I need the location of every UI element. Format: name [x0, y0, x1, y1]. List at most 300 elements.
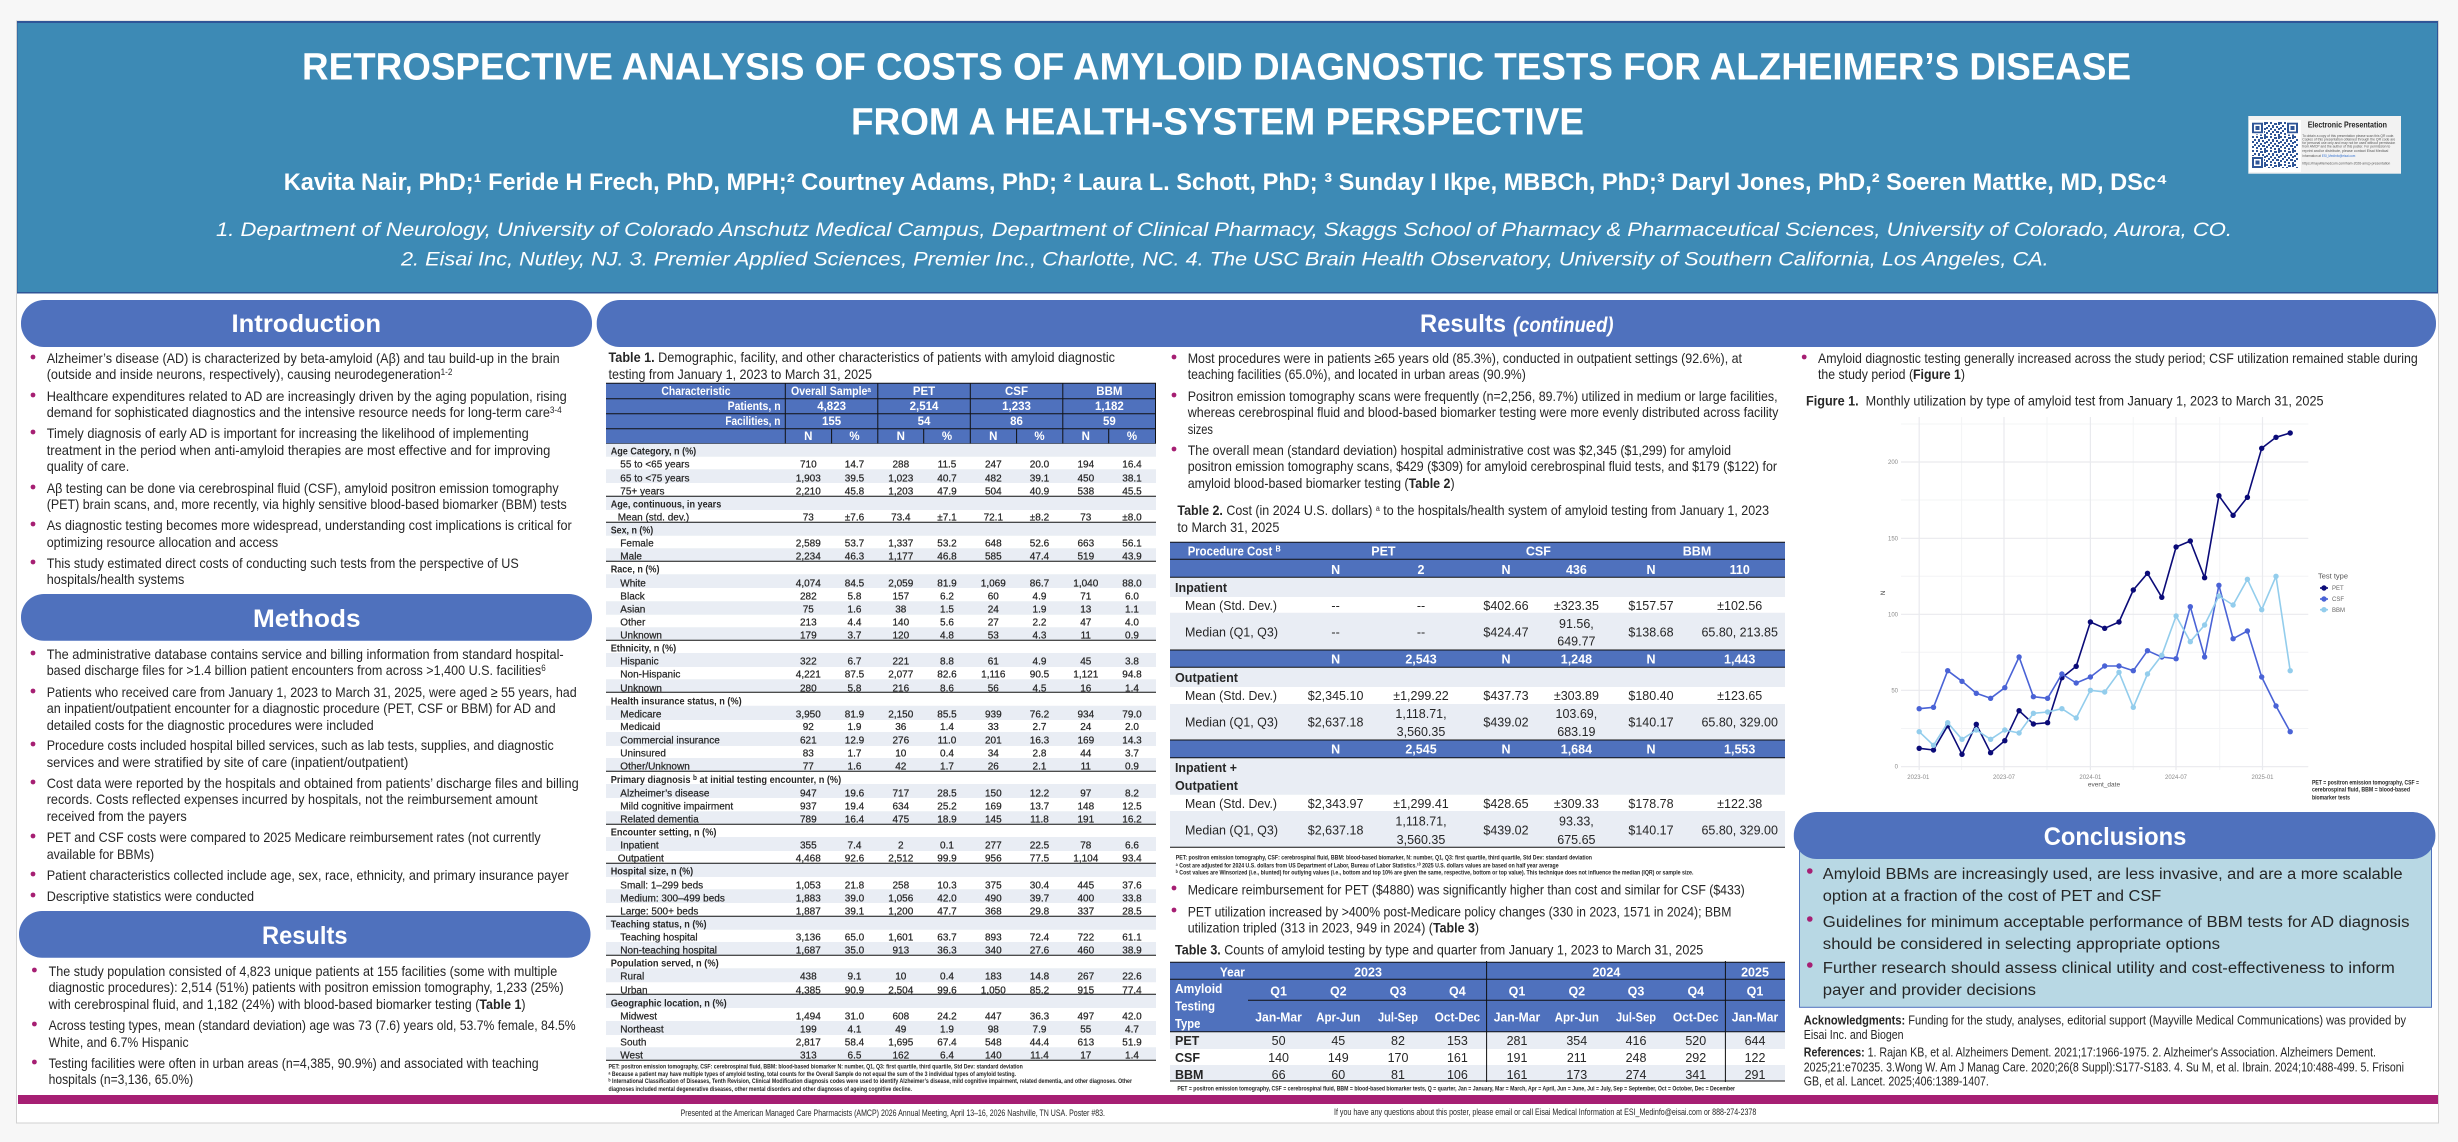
table 1 body: 282: [800, 592, 817, 602]
table 2 body: 103.69,: [1556, 707, 1597, 721]
table 3 body: Q2: [1568, 984, 1585, 998]
table 3 body: 81: [1391, 1068, 1405, 1082]
chart legend: [2318, 572, 2348, 614]
table 1 body: 38.9: [1122, 946, 1142, 956]
table 1 body: 10.3: [937, 880, 957, 892]
table 1 body: 42.0: [1122, 1012, 1142, 1022]
table 1 header: 54: [918, 416, 931, 428]
table 2 body: Mean (Std. Dev.): [1185, 689, 1277, 703]
y axis labels: N: [1881, 591, 1887, 595]
table 1 body: 78: [1080, 840, 1092, 852]
table 2 body: ±1,299.22: [1393, 689, 1449, 703]
table 1 body: 0.4: [940, 972, 954, 982]
x axis labels: 2024-01: [2079, 775, 2102, 781]
table 1 body: 1.4: [940, 722, 954, 733]
table 1 body: 519: [1077, 552, 1095, 562]
table 1 body: 482: [985, 474, 1002, 484]
table 1 body: 150: [985, 788, 1002, 800]
table 1 body: Hospital size, n (%): [611, 866, 693, 878]
table 2 body: Inpatient +: [1175, 761, 1237, 775]
table 1 header: BBM: [1096, 386, 1123, 398]
table 1 body: 30.4: [1030, 880, 1050, 892]
bullets: introduction: demand for sophisticated diagnostics and the intensive resource needs for long-term care: [47, 404, 602, 420]
table 1 body: 75+ years: [620, 486, 665, 498]
table 1 body: 25.2: [937, 802, 957, 812]
electronic presentation QR card: https://mayvillemedcom.com/ham-2026-amcp-presentation: [2302, 162, 2390, 166]
table 1 body: Other: [620, 618, 646, 628]
table 1 body: 3,950: [796, 710, 821, 720]
table 2 body: 65.80, 329.00: [1701, 716, 1778, 730]
table 1 body: 183: [985, 972, 1002, 982]
table 1 body: 40.9: [1030, 486, 1050, 498]
table 1 body: 45: [1080, 656, 1092, 668]
table 3 body: 82: [1391, 1034, 1405, 1048]
bullets: conclusions: payer and provider decisions: [1823, 982, 2036, 999]
table 1 body: 2,210: [796, 486, 821, 498]
bullets: results: White, and 6.7% Hispanic: [49, 1034, 189, 1050]
table 1 body: 90.5: [1030, 670, 1050, 680]
table 1 body: 44.4: [1030, 1038, 1050, 1048]
line: CSF: [1919, 585, 2290, 732]
table 1 body: Outpatient: [618, 854, 664, 864]
table 2 body: 683.19: [1557, 725, 1596, 739]
table 3 body: 341: [1685, 1068, 1706, 1082]
table 1 body: 947: [800, 788, 817, 800]
table 3 body: 520: [1685, 1034, 1706, 1048]
table 2 body: B: [1275, 544, 1281, 554]
table 2 body: $437.73: [1483, 689, 1529, 703]
table 2 body: N: [1501, 742, 1511, 756]
table 1 body: Black: [620, 592, 646, 602]
electronic presentation QR card: for personal use only and may not be used without permission: [2302, 141, 2395, 145]
table 1 body: 915: [1077, 986, 1095, 996]
table 1 body: 8.8: [940, 656, 954, 668]
table 1 body: 140: [985, 1050, 1002, 1062]
bullets: conclusions: Amyloid BBMs are increasingly used, are less invasive, and are a more scalable: [1823, 866, 2403, 883]
table 2 body: $424.47: [1483, 626, 1529, 640]
table 1 body: 36: [895, 722, 907, 733]
table 3 body: 416: [1626, 1034, 1646, 1048]
table 3 body: CSF: [1175, 1051, 1200, 1065]
table 1 body: 2,077: [888, 670, 914, 680]
table 1 body: 56.1: [1122, 538, 1142, 550]
bullets: methods: The administrative database contains service and billing information from standard hospital-: [47, 646, 564, 662]
table 1 body: 77: [803, 762, 814, 772]
table 3 body: PET: [1175, 1034, 1200, 1048]
figure abbreviations note: cerebrospinal fluid, BBM = blood-based: [2312, 786, 2410, 794]
table 1 body: 4,221: [796, 670, 821, 680]
table 1 body: 717: [892, 788, 910, 800]
table 1 body: 313: [800, 1050, 817, 1062]
table 2 body: ±1,299.41: [1393, 797, 1449, 811]
bullets: introduction: As diagnostic testing becomes more widespread, understanding cost implications is critical for: [47, 517, 572, 533]
table 1 body: 82.6: [937, 670, 957, 680]
table 1 body: 55 to <65 years: [620, 460, 690, 470]
table 3 body: 191: [1507, 1051, 1527, 1065]
table 2 body: ±309.33: [1554, 797, 1599, 811]
table 1 body: Teaching status, n (%): [611, 920, 706, 930]
table 1 body: 1,177: [888, 552, 914, 562]
table 1 body: 4,074: [796, 578, 821, 590]
table 2: costs: [1170, 502, 1785, 877]
table 2 body: $178.78: [1628, 797, 1674, 811]
table 3 caption: Table 3. Counts of amyloid testing by type and quarter from January 1, 2023 to March 31, 2025: [1175, 941, 1703, 957]
bullets: conclusions: should be considered in selecting appropriate options: [1823, 936, 2220, 953]
table 1 body: 447: [985, 1012, 1002, 1022]
acknowledgments: [1804, 1013, 2407, 1042]
references: [1804, 1045, 2404, 1088]
table 1 body: Age Category, n (%): [611, 446, 696, 458]
heading: results continued: [597, 300, 2436, 347]
table 1 body: 55: [1080, 1024, 1092, 1036]
table 1 body: 87.5: [845, 670, 865, 680]
bullets: introduction: treatment in the period when anti-amyloid therapies are most effective and for improving: [47, 442, 550, 458]
bullets: conclusions: Guidelines for minimum acceptable performance of BBM tests for AD diagnosis: [1823, 914, 2410, 931]
table 1 body: 497: [1077, 1012, 1095, 1022]
table 1 body: 73: [803, 512, 814, 524]
bullets: methods: PET and CSF costs were compared to 2025 Medicare reimbursement rates (not currently: [47, 829, 541, 845]
bullets: cost findings: positron emission tomography scans, $429 ($309) for amyloid cerebrospinal fluid tests, and $179 ($122) for: [1188, 458, 1777, 474]
bullets: introduction: Alzheimer’s disease (AD) is characterized by beta-amyloid (Aβ) and tau build-up in the brain: [47, 350, 560, 366]
table 1 body: 14.7: [845, 460, 865, 470]
table 1 body: Small: 1–299 beds: [620, 880, 703, 892]
bullets: results: Across testing types, mean (standard deviation) age was 73 (7.6) years old, 53.7% female, 84.5%: [49, 1017, 576, 1033]
line: BBM: [1919, 576, 2290, 745]
table 1 body: 2.7: [1033, 722, 1047, 733]
table 1 body: Hispanic: [620, 656, 659, 668]
table 1 header: %: [942, 431, 952, 443]
table 1 body: 42: [895, 762, 907, 772]
table 1 body: 11.8: [1030, 814, 1049, 826]
table 3 body: Apr-Jun: [1555, 1010, 1599, 1024]
chart legend: CSF: [2332, 597, 2344, 603]
table 1 body: 7.4: [848, 840, 862, 852]
table 2 body: 2: [1418, 563, 1425, 577]
panel: results: [19, 911, 590, 1087]
table 2 footnotes: PET: positron emission tomography, CSF: cerebrospinal fluid, BBM: blood-based biomarker, N: number, Q1, Q3: first quartile, third quartile, Std Dev: standard deviation: [1176, 855, 1592, 862]
acknowledgments: Eisai Inc. and Biogen: [1804, 1028, 1904, 1042]
table 1 body: 140: [892, 618, 910, 628]
table 1 body: 148: [1077, 802, 1095, 812]
bullets: introduction: 3-4: [550, 405, 562, 415]
bullets: methods: Patients who received care from January 1, 2023 to March 31, 2025, were aged ≥ 55 years, had: [47, 684, 577, 700]
table 1 body: 538: [1077, 486, 1095, 498]
table 1 body: 63.7: [937, 932, 957, 944]
figure abbreviations note: PET = positron emission tomography, CSF =: [2312, 780, 2419, 786]
table 1 body: 216: [892, 684, 910, 694]
bullets: introduction: [31, 350, 572, 587]
table 1 body: 11: [1081, 630, 1091, 642]
bullets: methods: based discharge files for >1.4 billion patient encounters from across >1,400 U.S. facilities: [47, 662, 598, 678]
table 1 body: 58.4: [845, 1038, 865, 1048]
table 1 body: 27: [988, 618, 999, 628]
table 1 body: 4,468: [796, 854, 821, 864]
table 2 body: --: [1331, 599, 1340, 613]
table 1 body: 258: [892, 880, 910, 892]
table 3 body: Testing: [1175, 1000, 1215, 1014]
table 1 body: 3.7: [1125, 748, 1139, 760]
table 1 body: 39.1: [845, 906, 865, 918]
table 1 body: 6.2: [940, 592, 954, 602]
electronic presentation QR card: Electronic Presentation: [2308, 120, 2387, 130]
table 3 body: 291: [1745, 1068, 1765, 1082]
panel: methods: [21, 594, 592, 904]
table 1 body: 12.2: [1030, 788, 1050, 800]
table 1 body: 36.3: [1030, 1012, 1050, 1022]
table 1 header: %: [849, 431, 860, 443]
table 2 body: Inpatient: [1175, 581, 1228, 595]
table 1 body: 28.5: [937, 788, 957, 800]
table 1 body: 2: [898, 840, 904, 852]
table 1 body: Ethnicity, n (%): [611, 644, 676, 654]
table 1 header: 4,823: [817, 401, 846, 413]
table 1 body: White: [620, 578, 646, 590]
bullets: methods: records. Costs reflected expenses incurred by hospitals, not the reimbursement amount: [47, 791, 538, 807]
table 2 footnotes: [1176, 855, 1694, 877]
panel: conclusions: [1794, 812, 2435, 1007]
table 1 body: 722: [1077, 932, 1095, 944]
table 1 header: CSF: [1005, 386, 1028, 398]
table 1 body: 21.8: [845, 880, 865, 892]
table 3 body: 211: [1567, 1051, 1587, 1065]
table 1 body: 47: [1080, 618, 1092, 628]
electronic presentation QR card: from AMCP and the author of this poster. For permission to: [2302, 144, 2390, 148]
panel: introduction: [21, 300, 592, 587]
table 1 body: 247: [985, 460, 1002, 470]
table 1 body: Male: [620, 552, 642, 562]
table 1 body: 2.1: [1033, 762, 1047, 772]
bullets: cost findings: Most procedures were in patients ≥65 years old (85.3%), conducted in outpatient settings (92.6%), at: [1188, 350, 1742, 366]
bullets: introduction: quality of care.: [47, 458, 129, 474]
table 1 body: 73.4: [891, 512, 911, 524]
table 2 body: $2,637.18: [1308, 824, 1363, 838]
table 1 body: 663: [1077, 538, 1095, 550]
table 1 header: N: [897, 431, 905, 443]
heading: results continued: (continued): [1513, 314, 1614, 337]
electronic presentation QR card: Information at ESI_Medinfo@eisai.com: [2302, 154, 2355, 158]
table 1 body: Rural: [620, 972, 644, 982]
table 1 body: 0.9: [1125, 630, 1139, 642]
table 1 body: 280: [800, 684, 817, 694]
table 1 body: 1.9: [848, 722, 862, 733]
table 1 body: 1,695: [888, 1038, 914, 1048]
table 1 body: 1,069: [981, 578, 1006, 590]
bullets: reimbursement and utilization: PET utilization increased by >400% post-Medicare policy changes (330 in 2023, 1571 in 2024); BBM: [1188, 903, 1731, 919]
table 1 body: 460: [1077, 946, 1095, 956]
table 1 body: 2,504: [888, 986, 914, 996]
table 2 body: Median (Q1, Q3): [1185, 824, 1278, 838]
table 3 body: 149: [1328, 1051, 1349, 1065]
bullet: amyloid testing trend: [1802, 350, 2418, 382]
table 1 body: ±8.2: [1030, 512, 1050, 524]
table 1 body: 81.9: [937, 578, 957, 590]
table 1 body: West: [620, 1050, 643, 1062]
table 2 body: Mean (Std. Dev.): [1185, 599, 1277, 613]
table 3 body: Jan-Mar: [1494, 1010, 1540, 1024]
table 1 body: 169: [1077, 736, 1095, 746]
table 3 body: Jul-Sep: [1378, 1010, 1418, 1024]
table 1 body: 10: [895, 748, 907, 760]
table 1 body: 12.9: [845, 736, 865, 746]
table 1 body: 47.4: [1030, 552, 1050, 562]
table 1 body: 1.5: [940, 604, 954, 616]
table 1 body: Medicaid: [620, 722, 660, 733]
table 1 body: 16: [1080, 684, 1092, 694]
table 3 body: Amyloid: [1175, 982, 1222, 996]
table 1 body: 84.5: [845, 578, 865, 590]
table 1 header: Overall Sample: [791, 386, 874, 398]
table 2 body: 3,560.35: [1397, 833, 1445, 847]
table 1 body: 36.3: [937, 946, 957, 956]
table 1 body: 22.6: [1122, 972, 1142, 982]
table 3 body: 173: [1566, 1068, 1587, 1082]
table 1 body: Sex, n (%): [611, 526, 653, 536]
table 3 body: Q1: [1747, 984, 1763, 998]
table 1 body: 621: [800, 736, 817, 746]
table 3 body: BBM: [1175, 1068, 1203, 1082]
table 1 body: Teaching hospital: [620, 932, 698, 944]
table 1 body: South: [620, 1038, 646, 1048]
table 1 body: 38: [895, 604, 907, 616]
table 1 body: 1.9: [940, 1024, 954, 1036]
table 3 body: 2025: [1741, 966, 1769, 980]
heading: methods: Methods: [253, 605, 360, 633]
table 1 body: 4.1: [848, 1024, 862, 1036]
table 1 body: 1,121: [1073, 670, 1099, 680]
table 1 body: 548: [985, 1038, 1002, 1048]
bullets: introduction: Aβ testing can be done via cerebrospinal fluid (CSF), amyloid positron emission tomography: [47, 480, 559, 496]
table 1 body: 2.0: [1125, 722, 1139, 733]
table 1 body: 201: [985, 736, 1002, 746]
table 2 body: 93.33,: [1559, 814, 1594, 828]
table 2 body: $2,343.97: [1308, 797, 1363, 811]
table 2 body: N: [1501, 563, 1511, 577]
y axis labels: 100: [1888, 612, 1899, 618]
affiliations: [216, 219, 2232, 271]
bullet: amyloid testing trend: the study period (Figure 1): [1818, 366, 1965, 382]
table 1 header: %: [1127, 431, 1137, 443]
table 1 body: 13.7: [1030, 802, 1050, 812]
table 3 body: Type: [1175, 1017, 1200, 1031]
bullets: introduction: This study estimated direct costs of conducting such tests from the perspective of US: [47, 555, 519, 571]
table 1 body: 86.7: [1030, 578, 1050, 590]
table 1 body: 648: [985, 538, 1002, 550]
table 1 body: ±7.6: [845, 512, 865, 524]
table 2 body: --: [1417, 599, 1425, 613]
table 1 body: 1.1: [1125, 604, 1139, 616]
table 1 body: 12.5: [1122, 802, 1142, 812]
bullets: methods: 6: [541, 663, 546, 673]
table 1 body: Unknown: [620, 684, 662, 694]
table 2 body: 1,443: [1724, 652, 1755, 666]
footer bar: [18, 1095, 2438, 1104]
table 1 body: 1,053: [796, 880, 821, 892]
table 1 body: 213: [800, 618, 817, 628]
table 3 body: 274: [1626, 1068, 1646, 1082]
chart legend: BBM: [2332, 608, 2345, 614]
table 1 body: 934: [1077, 710, 1095, 720]
affiliations: 2. Eisai Inc, Nutley, NJ. 3. Premier Applied Sciences, Premier Inc., Charlotte, NC. 4. The USC Brain Health Observatory, University of Southern California, Los Angeles, CA.: [400, 249, 2049, 271]
table 1 body: 53.7: [845, 538, 865, 550]
table 1 body: 77.4: [1122, 986, 1142, 996]
table 1 body: 2,059: [888, 578, 914, 590]
table 1 body: 53: [988, 630, 999, 642]
x axis labels: 2023-01: [1907, 775, 1930, 781]
table 2 body: 65.80, 213.85: [1701, 626, 1778, 640]
table 1 body: 85.5: [937, 710, 957, 720]
x axis labels: event_date: [2088, 782, 2120, 788]
table 1 body: 1,050: [981, 986, 1006, 996]
table 3 body: 2023: [1354, 966, 1382, 980]
table 1 body: 5.6: [940, 618, 954, 628]
table 1 body: 4.0: [1125, 618, 1139, 628]
bullets: results: with cerebrospinal fluid, and 1,182 (24%) with blood-based biomarker testing (Table 1): [48, 996, 526, 1012]
table 1 body: 490: [985, 894, 1002, 904]
table 2 body: ±303.89: [1554, 689, 1599, 703]
x axis labels: [1907, 775, 2274, 788]
table 1 body: 504: [985, 486, 1002, 498]
table 1 body: Inpatient: [620, 840, 659, 852]
table 1 body: 1.6: [848, 762, 862, 772]
table 1 body: 157: [892, 592, 910, 602]
table 1 body: 7.9: [1033, 1024, 1047, 1036]
table 1 body: 221: [892, 656, 910, 668]
table 1 body: 92.6: [845, 854, 865, 864]
table 1 body: 1,494: [796, 1012, 821, 1022]
bullets: cost findings: teaching facilities (65.0%), and located in urban areas (90.9%): [1188, 366, 1526, 382]
table 2 footnotes: ᵃ Cost are adjusted for 2024 U.S. dollars from US Department of Labor, Bureau of Labor Statistics.¹⁰ 2025 U.S. dollars values are based on half year average: [1176, 862, 1559, 870]
table 2 body: $428.65: [1483, 797, 1529, 811]
table 1 body: 6.6: [1125, 840, 1139, 852]
table 1 body: 93.4: [1122, 854, 1142, 864]
table 1 body: Female: [620, 538, 654, 550]
bullets: introduction: 1-2: [441, 367, 452, 377]
bullets: conclusions: [1807, 866, 2410, 999]
table 1 body: 75: [803, 604, 814, 616]
table 1 body: 937: [800, 802, 817, 812]
table 1 header: %: [1034, 431, 1045, 443]
table 1 body: 1,040: [1073, 578, 1099, 590]
table 1 body: 11.0: [938, 736, 957, 746]
table 2 caption: [1177, 502, 1769, 535]
table 1 body: 19.6: [845, 788, 865, 800]
table 1 body: 10: [895, 972, 907, 982]
title: FROM A HEALTH-SYSTEM PERSPECTIVE: [851, 101, 1584, 143]
table 1 header: a: [867, 387, 871, 394]
table 1 body: Related dementia: [620, 814, 699, 826]
table 1 body: 38.1: [1122, 474, 1142, 484]
table 1 body: Medicare: [620, 710, 662, 720]
table 2 body: $157.57: [1628, 599, 1674, 613]
table 1 body: 710: [800, 460, 817, 470]
table 2 body: N: [1646, 563, 1656, 577]
table 3 body: Jan-Mar: [1732, 1010, 1778, 1024]
table 1 body: 1,883: [796, 894, 821, 904]
table 1 body: 43.9: [1122, 552, 1142, 562]
bullets: cost findings: Positron emission tomography scans were frequently (n=2,256, 89.7%) utilized in medium or large facilities,: [1188, 388, 1778, 404]
table 1 body: 72.1: [984, 512, 1003, 524]
bullets: results: Testing facilities were often in urban areas (n=4,385, 90.9%) and associated with teaching: [49, 1055, 539, 1071]
electronic presentation QR card: To obtain a copy of this presentation please scan this QR code.: [2302, 134, 2394, 138]
table 3 body: Apr-Jun: [1316, 1010, 1360, 1024]
table 2 caption: to the hospitals/health system of amyloid testing from January 1, 2023: [1380, 502, 1769, 518]
bullets: introduction: Timely diagnosis of early AD is important for increasing the likelihood of implementing: [47, 425, 529, 441]
table 3 body: Q2: [1330, 984, 1347, 998]
table 3 body: 354: [1566, 1034, 1587, 1048]
table 1 body: 2,234: [796, 552, 821, 562]
table 1 header: [606, 383, 1156, 444]
table 2 body: 65.80, 329.00: [1701, 824, 1778, 838]
